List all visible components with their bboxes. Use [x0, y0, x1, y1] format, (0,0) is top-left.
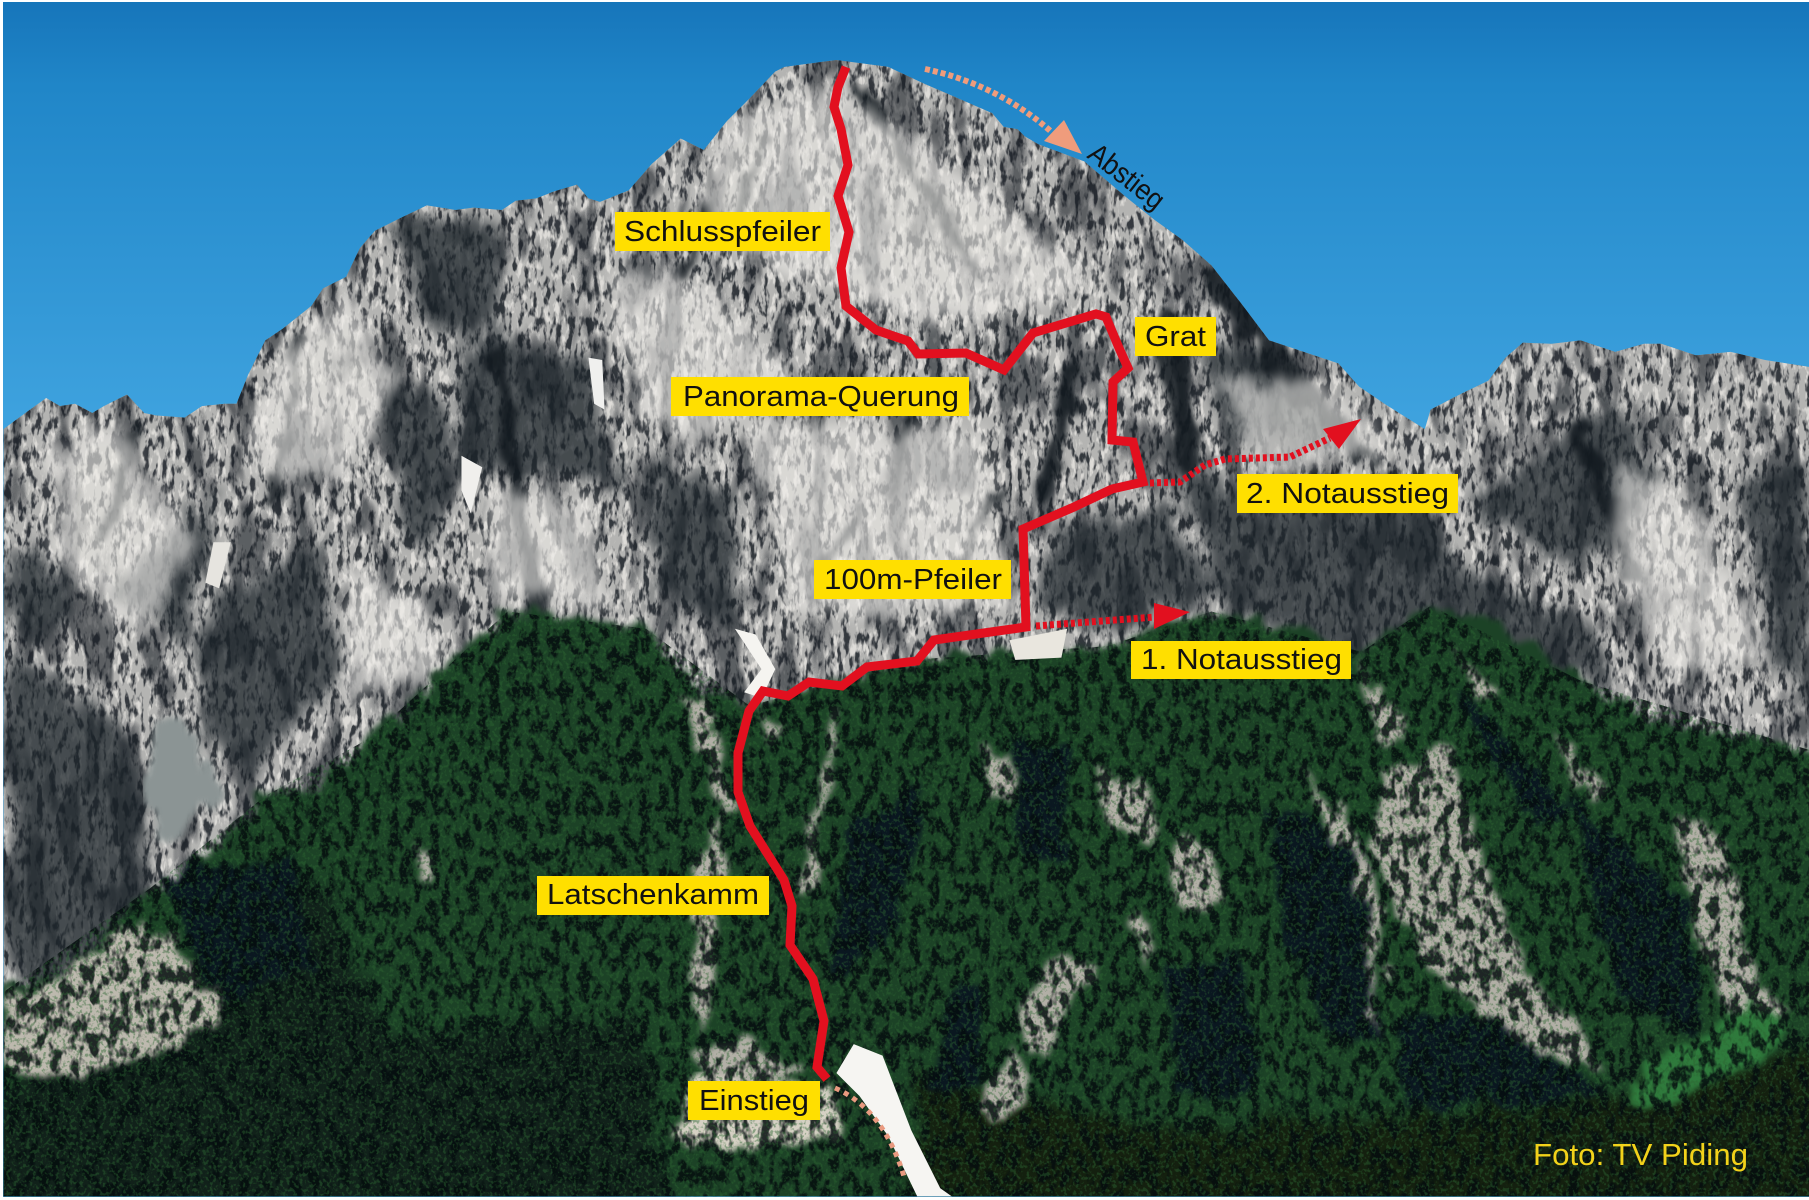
label: 100m-Pfeiler: 100m-Pfeiler [824, 564, 1002, 596]
photo credit: Foto: TV Piding [1533, 1137, 1748, 1172]
arrow: Abstieg descent [925, 69, 1082, 154]
label: Latschenkamm: Latschenkamm [547, 879, 759, 911]
snow patch [461, 456, 482, 513]
label: 2. Notausstieg: 2. Notausstieg [1246, 478, 1449, 510]
label: Einstieg: Einstieg [699, 1085, 809, 1117]
label: Latschenkamm [537, 876, 769, 915]
snow in couloir [735, 629, 775, 698]
left scree [6, 917, 225, 1079]
label: 2. Notausstieg [1237, 474, 1458, 513]
rock shadow zones [6, 81, 1809, 992]
arrow: 1. Notausstieg exit [1036, 603, 1190, 629]
label: 100m-Pfeiler [814, 560, 1011, 599]
label: 1. Notausstieg: 1. Notausstieg [1141, 644, 1342, 676]
lower dark forest [0, 877, 669, 1200]
label: Grat [1135, 317, 1216, 356]
forest body [0, 606, 1809, 1200]
snow patch high on the wall [588, 358, 605, 410]
snow field [836, 1044, 952, 1196]
foot path to snow field [835, 1088, 905, 1180]
label: Grat: Grat [1145, 321, 1206, 353]
forest speckle overlay [0, 600, 1809, 1200]
snow patch left [205, 542, 231, 588]
bright rock zones [46, 81, 1765, 692]
cliff bands [415, 646, 1794, 1131]
arrow: 2. Notausstieg exit [1150, 419, 1361, 483]
route line [738, 67, 1143, 1079]
label: Einstieg [688, 1081, 820, 1120]
label: Schlusspfeiler: Schlusspfeiler [624, 216, 821, 248]
grey left cliff [150, 715, 219, 842]
label: Abstieg: Abstieg [1082, 137, 1171, 217]
rubble below the pillar [1009, 629, 1067, 660]
scree at route start [671, 1079, 842, 1148]
shadowed gullies [162, 692, 1702, 1108]
label: Schlusspfeiler [615, 212, 830, 251]
label: Panorama-Querung: Panorama-Querung [683, 381, 959, 413]
forest slopes [0, 606, 1809, 1200]
